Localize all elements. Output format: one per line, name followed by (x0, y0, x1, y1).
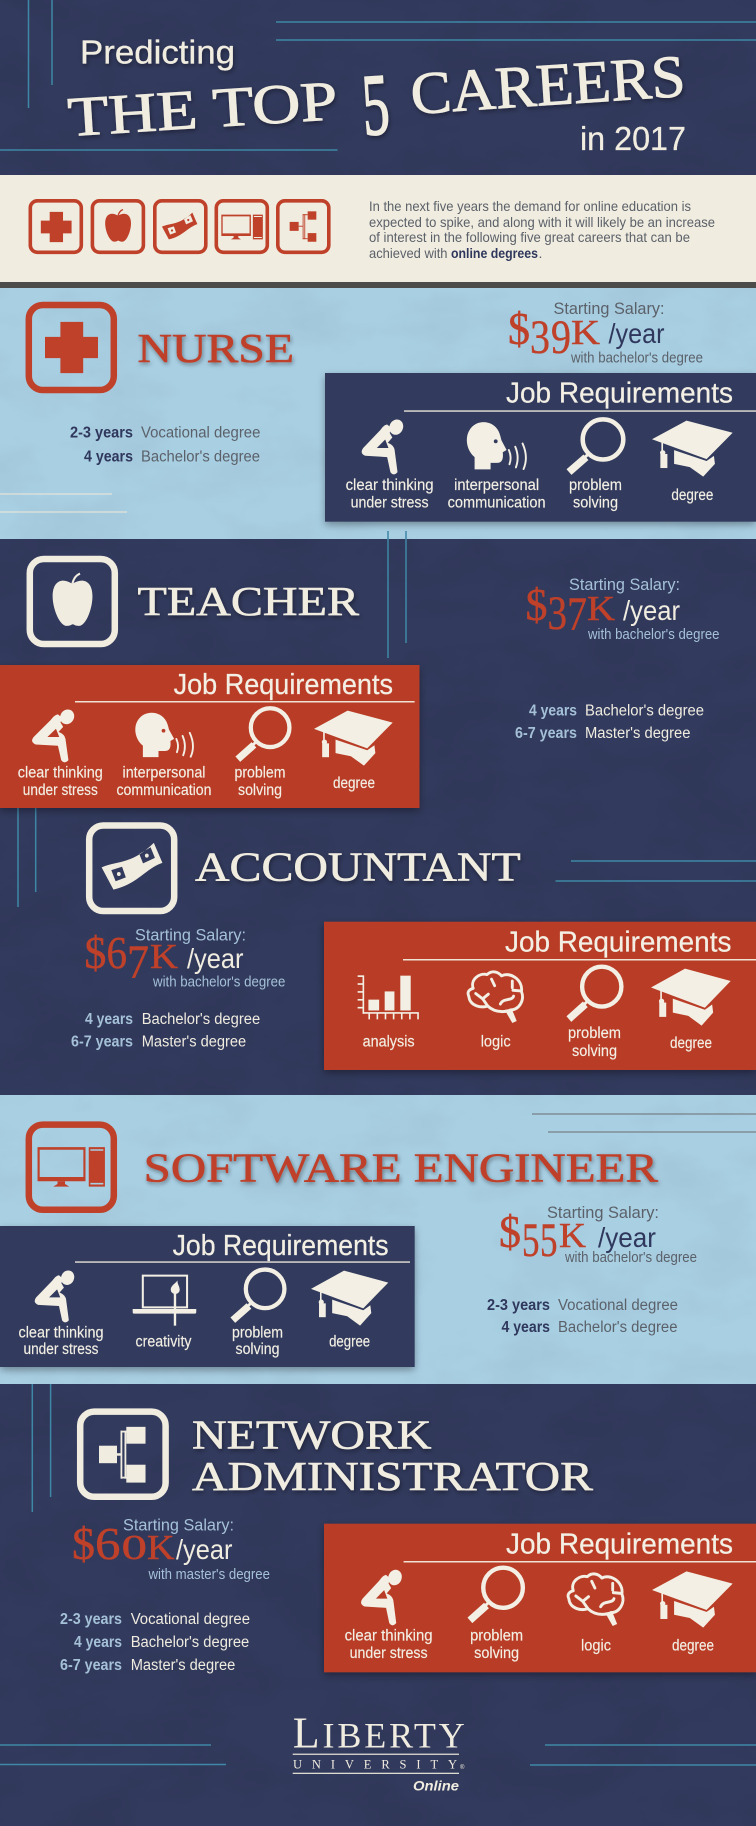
salary: network administrator: 0 (122, 1528, 147, 1567)
heading: teacher: TEACHER (138, 578, 360, 624)
requirement: degree: degree (333, 775, 375, 792)
title line: in 2017: in 2017 (580, 121, 686, 158)
panel: nurse job requirements (325, 373, 756, 522)
intro panel (0, 175, 756, 288)
salary: teacher: /year (623, 595, 680, 626)
salary: software engineer: with bachelor's degree (564, 1250, 697, 1266)
salary: software engineer: /year (598, 1222, 656, 1253)
title line: The Top 5 Careers: THE TOP (66, 70, 339, 149)
requirement: interpersonal communication (116, 713, 212, 799)
requirement: problem solving: problem (568, 1025, 621, 1042)
icon row: five career icons (30, 201, 329, 252)
requirement: problem solving (232, 1270, 284, 1358)
requirement: interpersonal communication (448, 422, 546, 512)
panel: nurse job requirements: Job Requirements (506, 378, 733, 410)
panel: network administrator job requirements: Job Requirements (506, 1528, 733, 1560)
requirement: creativity (133, 1275, 196, 1351)
requirement: clear thinking under stress (18, 1268, 104, 1358)
salary: network administrator: with master's degree (148, 1567, 270, 1583)
salary: nurse: with bachelor's degree (570, 351, 703, 367)
title line: The Top 5 Careers: 5 (359, 56, 392, 155)
header title (66, 34, 687, 158)
heading: software engineer: SOFTWARE ENGINEER (144, 1145, 659, 1191)
logo: Liberty University Online: ® (460, 1764, 465, 1771)
requirement: degree: degree (670, 1035, 712, 1052)
education years: network administrator: 6-7 years (60, 1657, 122, 1674)
salary: accountant: /year (187, 943, 244, 974)
education years: accountant (71, 1011, 260, 1051)
salary: software engineer: K (559, 1216, 586, 1255)
requirement: logic: logic (481, 1034, 511, 1051)
requirement: clear thinking under stress (345, 1567, 433, 1662)
intro paragraph: achieved with (369, 245, 448, 261)
requirement: clear thinking under stress: under stress (23, 782, 98, 799)
requirement: degree (651, 969, 731, 1052)
salary: teacher: K (587, 589, 615, 628)
requirement: problem solving (568, 967, 621, 1060)
requirement: problem solving: solving (236, 1341, 280, 1358)
requirement: degree (314, 711, 393, 792)
icon: teacher apple (30, 559, 115, 644)
section: software engineer (0, 1125, 697, 1367)
education years: software engineer (487, 1297, 678, 1336)
requirement: clear thinking under stress: under stress (350, 1645, 428, 1662)
salary: nurse: Starting Salary: (554, 299, 664, 318)
education years: software engineer: 4 years (502, 1319, 550, 1336)
education years: network administrator (60, 1611, 250, 1674)
requirement: degree: degree (672, 1638, 714, 1655)
requirement: problem solving: problem (234, 765, 286, 782)
requirement: problem solving: problem (569, 477, 622, 494)
requirement: analysis (358, 975, 419, 1051)
salary: accountant: K (150, 937, 178, 976)
salary: network administrator: Starting Salary: (123, 1516, 234, 1535)
education years: software engineer: 2-3 years (487, 1297, 550, 1314)
requirement: interpersonal communication: interpersonal (122, 765, 206, 782)
icon: computer (29, 1125, 114, 1210)
education years: nurse: 4 years (84, 449, 133, 466)
requirement: problem solving: solving (572, 1043, 617, 1060)
logo: Liberty University Online: Online (413, 1778, 459, 1794)
salary: teacher: Starting Salary: (569, 575, 680, 594)
education years: accountant: 4 years (85, 1011, 133, 1028)
salary: accountant: $ (84, 927, 106, 978)
requirement: clear thinking under stress: clear thinking (18, 765, 103, 782)
heading: accountant: ACCOUNTANT (195, 844, 521, 890)
salary: software engineer: Starting Salary: (547, 1203, 659, 1222)
salary: teacher: 3 (548, 587, 567, 640)
requirement: clear thinking under stress (18, 707, 103, 799)
salary: nurse (508, 299, 703, 367)
salary: accountant: 6 (106, 927, 127, 978)
requirement: degree (311, 1271, 388, 1351)
requirement: clear thinking under stress: clear thinking (18, 1325, 104, 1342)
intro paragraph (369, 198, 715, 261)
requirement: problem solving: problem (470, 1628, 523, 1645)
requirement: clear thinking under stress: clear thinking (346, 477, 434, 494)
requirement: problem solving (470, 1568, 523, 1662)
salary: nurse: K (571, 313, 600, 352)
education years: accountant: Bachelor's degree (142, 1011, 260, 1028)
salary: network administrator (72, 1516, 270, 1583)
logo: Liberty University Online: LIBERTY (293, 1709, 465, 1758)
requirement: clear thinking under stress (346, 417, 434, 512)
requirement: analysis: analysis (363, 1034, 415, 1051)
panel: software engineer job requirements: Job Requirements (173, 1230, 389, 1262)
requirement: clear thinking under stress: under stress (351, 495, 429, 512)
intro paragraph: of interest in the following five great careers that can be (369, 229, 690, 245)
intro paragraph: In the next five years the demand for online education is (369, 198, 691, 214)
requirement: logic (568, 1574, 623, 1655)
salary: teacher: $ (526, 579, 548, 630)
logo: Liberty University Online: UNIVERSITY (293, 1757, 457, 1771)
requirement: problem solving (569, 419, 623, 512)
salary: nurse: 9 (551, 311, 571, 364)
requirement: interpersonal communication: interpersonal (454, 477, 539, 494)
education years: network administrator: Bachelor's degree (131, 1634, 249, 1651)
education years: nurse: 2-3 years (70, 425, 133, 442)
requirement: problem solving: solving (573, 495, 618, 512)
requirement: degree: degree (671, 487, 713, 504)
panel: accountant job requirements: Job Requirements (505, 927, 731, 959)
requirement: logic: logic (581, 1638, 611, 1655)
panel: teacher job requirements (0, 665, 420, 808)
title line: The Top 5 Careers (66, 43, 687, 155)
requirement: problem solving: solving (474, 1645, 519, 1662)
intro paragraph: . (538, 245, 542, 261)
panel: network administrator job requirements (324, 1524, 756, 1672)
education years: teacher: Master's degree (585, 725, 690, 742)
education years: teacher: 6-7 years (515, 725, 577, 742)
education years: network administrator: 2-3 years (60, 1611, 122, 1628)
salary: software engineer (499, 1203, 697, 1267)
heading: network administrator (192, 1411, 594, 1499)
requirement: clear thinking under stress: clear thinking (345, 1628, 433, 1645)
panel: software engineer job requirements (0, 1226, 415, 1367)
section: network administrator (60, 1411, 756, 1674)
education years: nurse: Bachelor's degree (141, 449, 260, 466)
education years: software engineer: Vocational degree (558, 1297, 678, 1314)
requirement: logic (468, 972, 522, 1051)
salary: nurse: 3 (530, 311, 550, 364)
salary: teacher (526, 575, 720, 643)
salary: accountant: 7 (127, 936, 149, 989)
education years: network administrator: Vocational degree (131, 1611, 250, 1628)
requirement: degree (652, 1571, 733, 1655)
section: teacher (0, 559, 720, 808)
heading: nurse: NURSE (138, 325, 294, 371)
salary: network administrator: K (147, 1528, 174, 1567)
education years: teacher (515, 703, 704, 742)
requirement: interpersonal communication: communication (448, 495, 546, 512)
salary: nurse: /year (608, 318, 664, 349)
education years: nurse (70, 425, 260, 466)
salary: network administrator: $ (72, 1518, 95, 1569)
requirement: interpersonal communication: communication (116, 782, 212, 799)
intro paragraph: online degrees (451, 245, 538, 261)
title line: The Top 5 Careers: CAREERS (408, 43, 687, 127)
salary: software engineer: $ (499, 1206, 521, 1257)
requirement: creativity: creativity (136, 1334, 192, 1351)
education years: nurse: Vocational degree (141, 425, 260, 442)
requirement: problem solving: problem (232, 1325, 283, 1342)
salary: accountant (84, 926, 285, 991)
requirement: degree: degree (329, 1334, 370, 1351)
requirement: clear thinking under stress: under stress (24, 1341, 99, 1358)
heading: network administrator: NETWORK (192, 1411, 432, 1457)
icon: network (80, 1412, 166, 1497)
intro paragraph: expected to spike, and along with it will likely be an increase (369, 214, 715, 230)
education years: software engineer: Bachelor's degree (558, 1319, 678, 1336)
salary: network administrator: 6 (95, 1518, 120, 1569)
requirement: problem solving (234, 708, 289, 799)
education years: teacher: 4 years (529, 703, 577, 720)
education years: network administrator: 4 years (74, 1634, 122, 1651)
salary: teacher: with bachelor's degree (587, 627, 720, 643)
salary: teacher: 7 (567, 588, 587, 641)
icon: accountant money (89, 826, 174, 911)
title line: Predicting: Predicting (80, 34, 235, 72)
panel: teacher job requirements: Job Requirements (174, 669, 393, 701)
education years: accountant: 6-7 years (71, 1034, 133, 1051)
salary: accountant: with bachelor's degree (152, 975, 285, 991)
salary: software engineer: 5 (522, 1214, 540, 1267)
heading: network administrator: ADMINISTRATOR (192, 1453, 594, 1499)
logo: Liberty University Online (293, 1709, 465, 1794)
section: nurse (29, 299, 756, 522)
education years: teacher: Bachelor's degree (585, 703, 704, 720)
education years: accountant: Master's degree (142, 1034, 246, 1051)
requirement: degree (652, 421, 733, 504)
icon: nurse cross (29, 305, 114, 390)
salary: software engineer: 5 (540, 1214, 558, 1267)
panel: accountant job requirements (324, 922, 756, 1070)
salary: accountant: Starting Salary: (135, 926, 246, 945)
section: accountant (71, 826, 756, 1070)
salary: nurse: $ (508, 303, 530, 354)
salary: network administrator: /year (176, 1534, 232, 1565)
requirement: problem solving: solving (238, 782, 282, 799)
education years: network administrator: Master's degree (131, 1657, 235, 1674)
